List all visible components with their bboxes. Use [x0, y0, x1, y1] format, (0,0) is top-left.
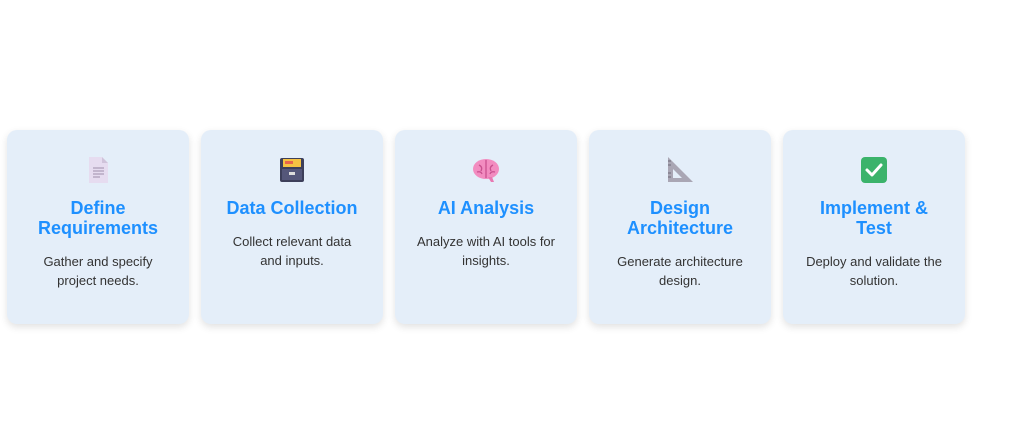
description: project needs. [57, 273, 139, 288]
description: solution. [850, 273, 898, 288]
description [233, 234, 352, 268]
icon: file cabinet [280, 158, 304, 182]
title: Test [856, 218, 892, 238]
card: Implement & Test [783, 130, 965, 324]
description: Deploy and validate the [806, 254, 942, 269]
title [820, 198, 928, 238]
title: Define [70, 198, 126, 218]
description: insights. [462, 253, 510, 268]
description: Generate architecture [617, 254, 743, 269]
icon: triangle ruler [668, 157, 693, 182]
title: Architecture [627, 218, 733, 238]
description: Analyze with AI tools for [417, 234, 555, 249]
description: Gather and specify [43, 254, 153, 269]
title: Implement & [820, 198, 928, 218]
description [617, 254, 743, 288]
title: Requirements [38, 218, 158, 238]
title: Data Collection [226, 198, 358, 218]
card: AI Analysis [395, 130, 577, 324]
title [38, 198, 158, 238]
description [43, 254, 153, 288]
description [806, 254, 942, 288]
description [417, 234, 555, 268]
title: AI Analysis [438, 198, 534, 218]
title [627, 198, 733, 238]
card: Data Collection [201, 130, 383, 324]
card: Define Requirements [7, 130, 189, 324]
icon: brain [473, 159, 499, 182]
description: design. [659, 273, 701, 288]
title: Design [650, 198, 710, 218]
description: Collect relevant data [233, 234, 351, 249]
card: Design Architecture [589, 130, 771, 324]
icon: document [89, 157, 108, 183]
icon: check mark [861, 157, 887, 183]
description: and inputs. [260, 253, 324, 268]
